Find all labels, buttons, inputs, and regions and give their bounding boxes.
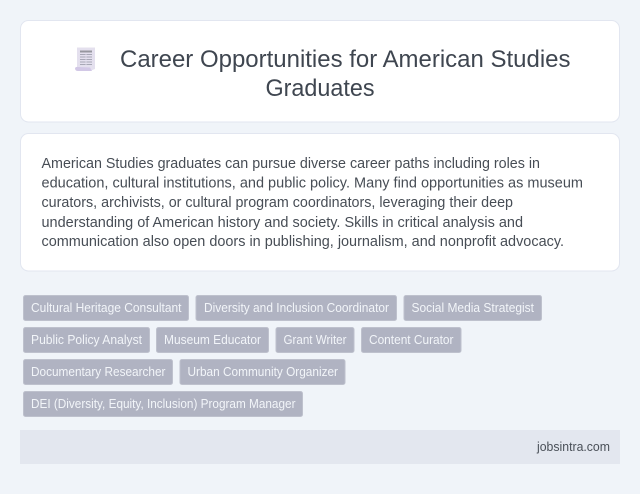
- tag: Grant Writer: [276, 328, 354, 352]
- tag: DEI Program Manager: [24, 392, 302, 416]
- tag: Social Media Strategist: [404, 296, 542, 320]
- tag: Urban Community Organizer: Urban Community Organizer: [188, 364, 339, 379]
- tag: Diversity and Inclusion Coordinator: Diversity and Inclusion Coordinator: [204, 300, 390, 315]
- title: Career Opportunities for American Studies: [120, 46, 570, 73]
- footer: jobsintra.com: [536, 440, 610, 454]
- title: [120, 46, 570, 102]
- text block: description: understanding of American history and society. Skills in critical analysis and: [42, 214, 523, 231]
- tag: DEI Program Manager: DEI (Diversity, Equity, Inclusion) Program Manager: [31, 396, 296, 411]
- tag: Social Media Strategist: Social Media Strategist: [412, 300, 534, 315]
- text block: description: curators, archivists, or cultural program coordinators, leveraging their deep: [42, 194, 513, 211]
- tag: Grant Writer: Grant Writer: [284, 332, 347, 347]
- text block: description: education, cultural institutions, and public policy. Many find opportunities as museum: [42, 174, 583, 192]
- tag: Public Policy Analyst: Public Policy Analyst: [31, 332, 142, 347]
- panel: header: [20, 20, 620, 122]
- text block: description: American Studies graduates can pursue diverse career paths including roles in: [42, 155, 540, 172]
- text block: description: [42, 155, 583, 250]
- tag: Cultural Heritage Consultant: Cultural Heritage Consultant: [31, 300, 182, 315]
- tag: Cultural Heritage Consultant: [24, 296, 188, 320]
- tag: Documentary Researcher: [24, 360, 172, 384]
- tag: Urban Community Organizer: [180, 360, 345, 384]
- text block: description: communication also open doors in publishing, journalism, and nonprofit advocacy.: [42, 233, 564, 250]
- tag: Museum Educator: [156, 328, 268, 352]
- tag: Documentary Researcher: Documentary Researcher: [31, 364, 166, 379]
- tag: Content Curator: Content Curator: [369, 332, 454, 347]
- tag: Museum Educator: Museum Educator: [164, 332, 262, 347]
- tag: Public Policy Analyst: [24, 328, 150, 352]
- panel: description: [20, 134, 620, 271]
- tag: Content Curator: [362, 328, 461, 352]
- tag: Diversity and Inclusion Coordinator: [196, 296, 396, 320]
- footer: [20, 430, 620, 464]
- icon: paper scroll: [75, 48, 95, 71]
- title: Graduates: [266, 75, 374, 102]
